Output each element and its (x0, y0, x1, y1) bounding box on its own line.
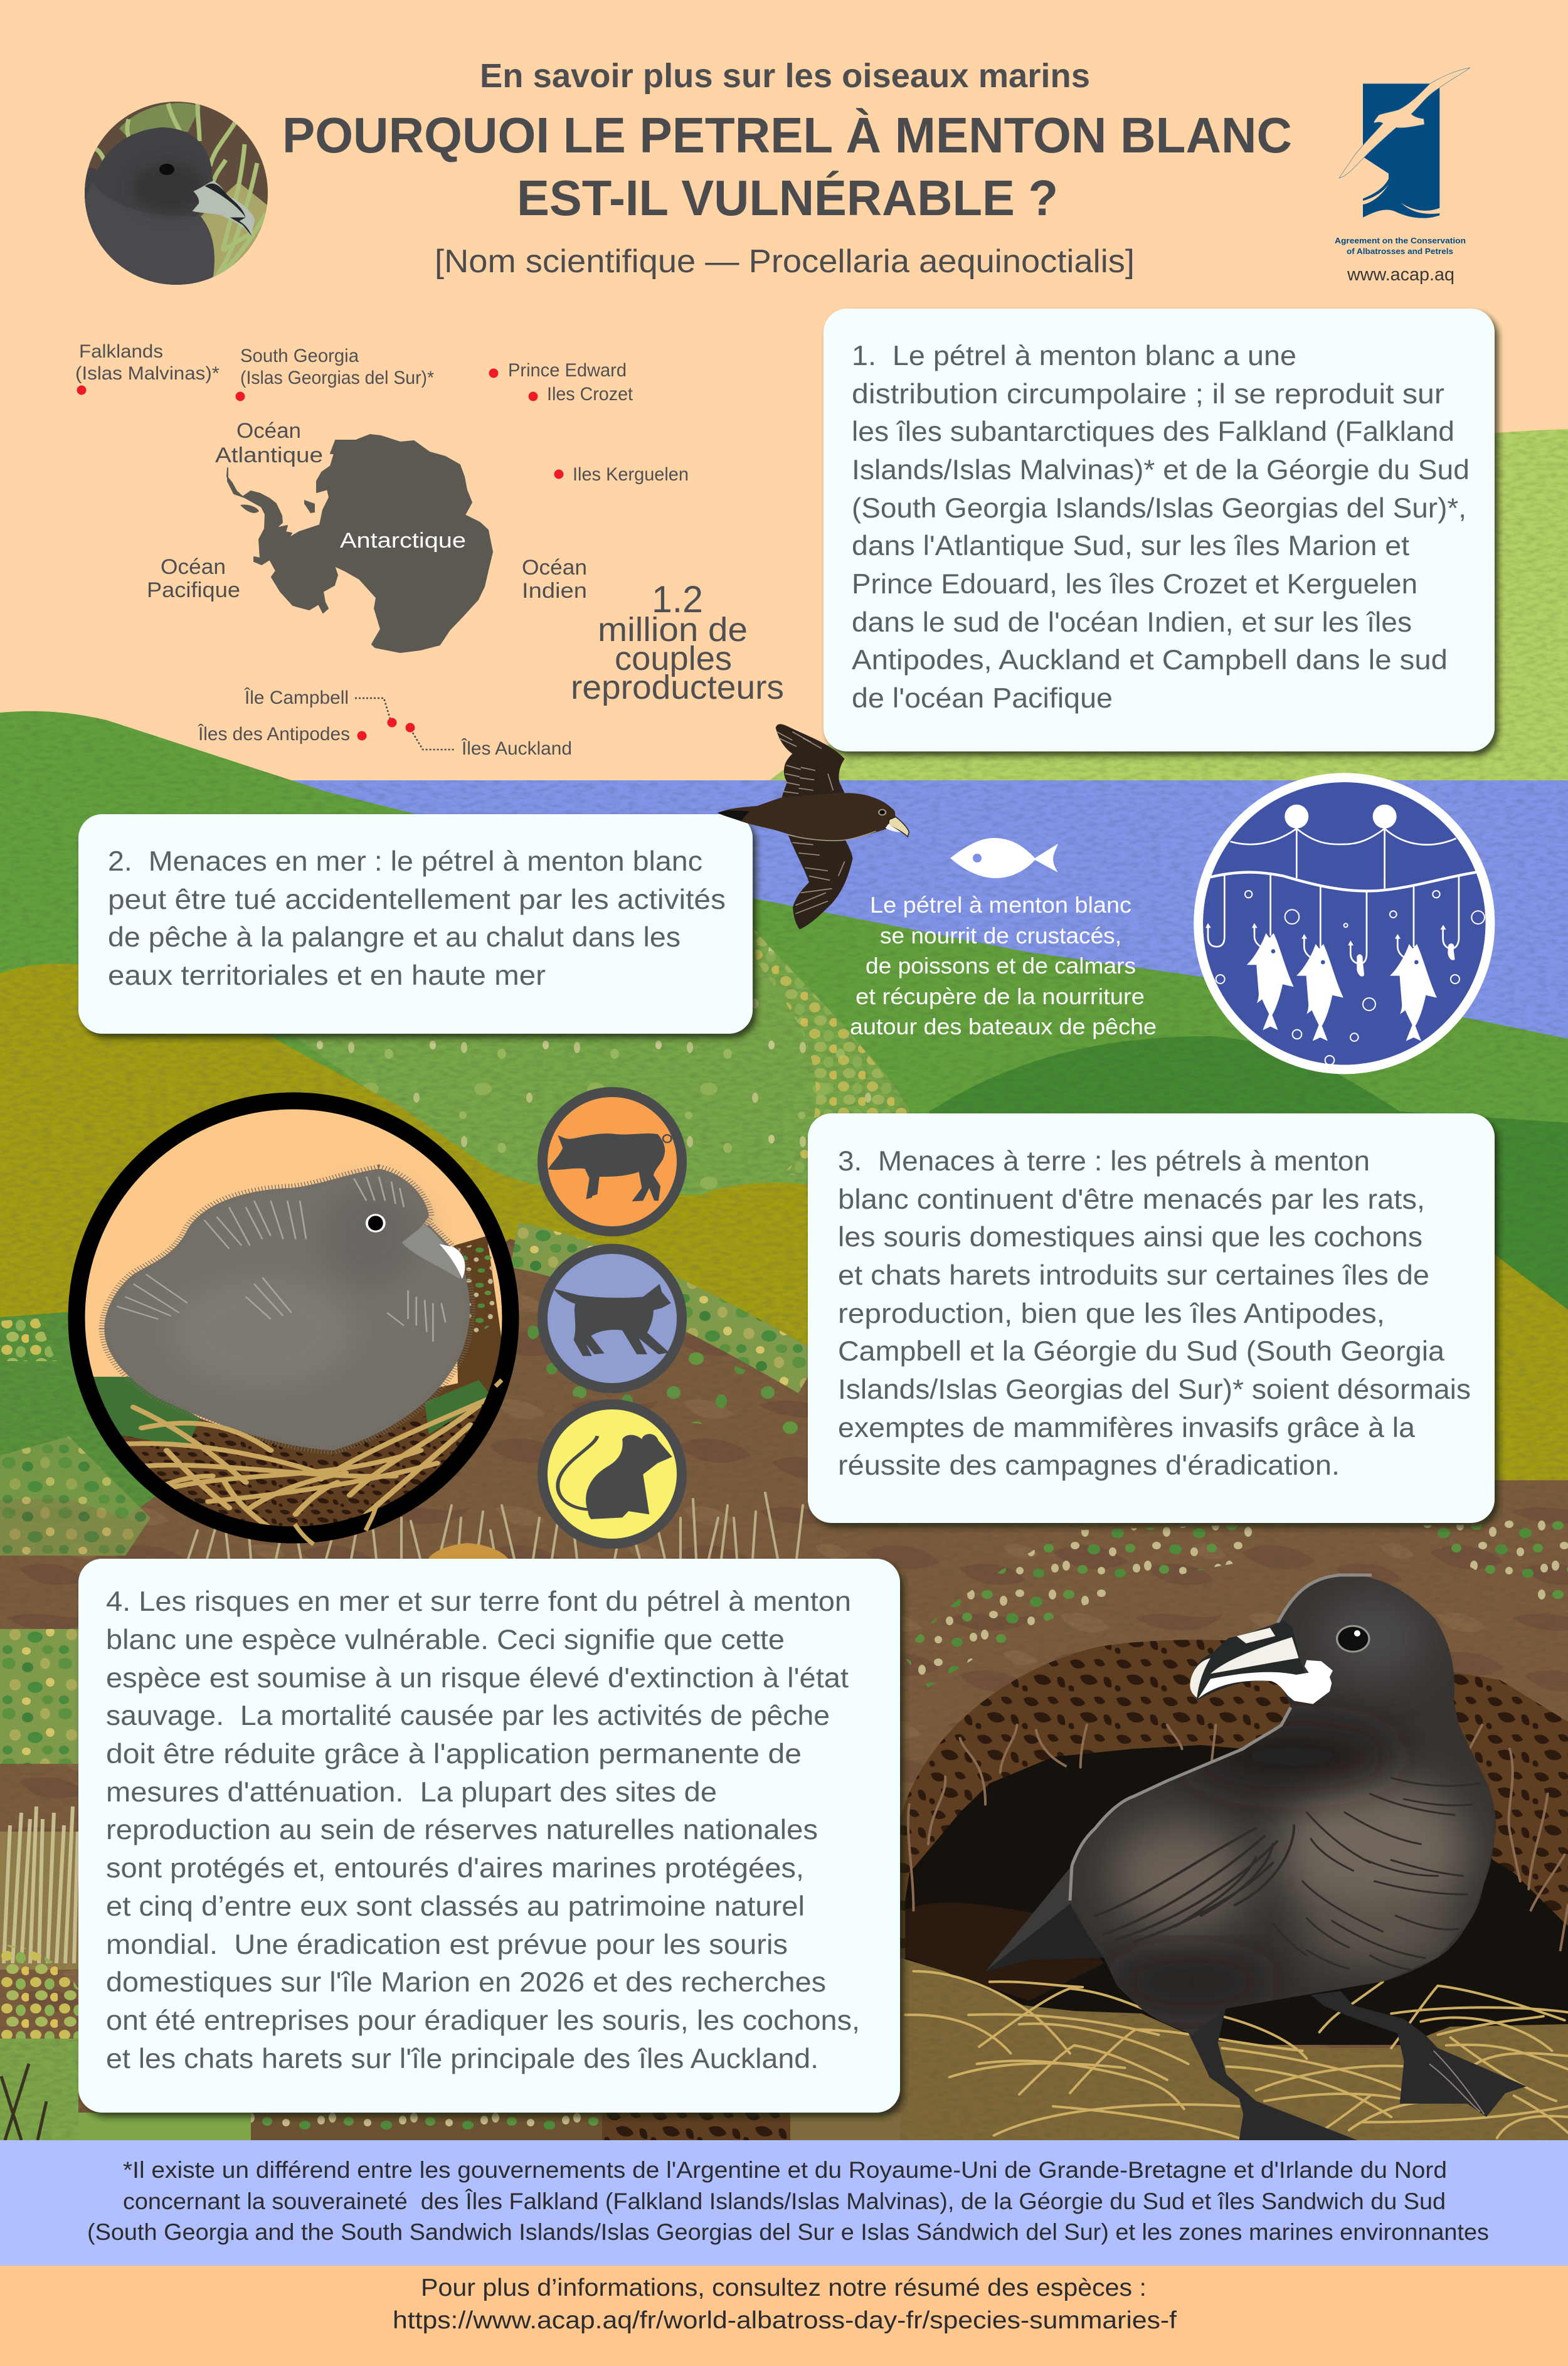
beak upper plate (1210, 1637, 1299, 1674)
logo caption: Agreement on the Conservation (1335, 236, 1466, 245)
mouse icon circle (543, 1404, 682, 1544)
beak (193, 181, 255, 236)
text: distribution paragraph: dans le sud de l'océan Indien, et sur les îles (852, 607, 1412, 638)
chick circle (63, 1091, 527, 1549)
ocean labels: Pacifique (147, 578, 240, 602)
bait worms (1357, 954, 1364, 977)
label Antarctique: Antarctique (340, 529, 466, 553)
scientific name: [Nom scientifique — Procellaria aequinoctialis] (435, 243, 1135, 280)
text: conservation paragraph: espèce est soumise à un risque élevé d'extinction à l'état (106, 1663, 849, 1694)
more information text (393, 2274, 1177, 2334)
tail (986, 1904, 1104, 1971)
island labels: Iles Crozet (547, 384, 633, 405)
white chin patch (1198, 1660, 1333, 1704)
text: distribution paragraph: distribution circumpolaire ; il se reproduit sur (852, 379, 1444, 410)
text: diet note: autour des bateaux de pêche (850, 1014, 1157, 1039)
text: threats on land paragraph: réussite des campagnes d'éradication. (838, 1450, 1340, 1481)
kicker heading: En savoir plus sur les oiseaux marins (480, 57, 1090, 95)
upper wing (776, 724, 845, 798)
moss patch left below chick (0, 1436, 151, 1556)
island labels: Iles Kerguelen (573, 464, 689, 485)
island labels: (Islas Georgias del Sur)* (240, 368, 434, 388)
flying petrel illustration (718, 724, 909, 930)
photo background foliage (119, 103, 201, 135)
text: distribution paragraph: Antipodes, Auckland et Campbell dans le sud (852, 645, 1448, 676)
population figure: million de (598, 611, 748, 649)
island labels (75, 341, 689, 759)
panel: card 3 threats on land (808, 1113, 1495, 1523)
map of Antarctica (75, 341, 784, 759)
ocean labels: Atlantique (215, 443, 323, 467)
eye (159, 164, 174, 175)
main title: POURQUOI LE PETREL À MENTON BLANC (282, 107, 1292, 163)
text: conservation paragraph: mondial. Une éradication est prévue pour les souris (106, 1929, 788, 1960)
text: conservation paragraph: 4. Les risques en mer et sur terre font du pétrel à menton (106, 1586, 851, 1617)
cat icon circle (543, 1249, 682, 1388)
text: conservation paragraph (106, 1586, 860, 2074)
burrow roots and straw (905, 1725, 1568, 2138)
moss at right edge (1411, 1505, 1568, 1612)
beak dark base (1190, 1620, 1305, 1700)
chick beak (402, 1225, 460, 1279)
grey back edge (1070, 1575, 1372, 1901)
ocean labels: Océan (522, 556, 587, 580)
logo caption: of Albatrosses and Petrels (1347, 247, 1453, 256)
beak culmen plate (1237, 1628, 1275, 1643)
bird cheek shading (132, 163, 207, 213)
logo caption (1335, 236, 1466, 256)
down feather marks (117, 1177, 445, 1342)
hooked fish (1247, 933, 1294, 1030)
text: distribution paragraph: les îles subantarctiques des Falkland (Falkland (852, 416, 1454, 447)
fishing longline circle (1199, 778, 1490, 1069)
icon: white fish (950, 838, 1058, 878)
body silhouette (985, 1575, 1496, 2035)
foot webbing lines (1429, 2050, 1485, 2114)
island labels: Îles Auckland (461, 738, 572, 759)
chick scene inside circle (85, 1109, 502, 1527)
island labels: Îles des Antipodes (198, 724, 350, 745)
text: diet note (850, 892, 1157, 1039)
belly line (788, 831, 876, 841)
landscape background (0, 429, 1568, 2140)
lichen covered bush (290, 928, 909, 1198)
text: conservation paragraph: sauvage. La mortalité causée par les activités de pêche (106, 1700, 830, 1731)
island labels: South Georgia (240, 346, 359, 366)
left margin vegetation (0, 1629, 78, 2140)
olive hill (0, 963, 1568, 1518)
text: threats at sea paragraph: eaux territoriales et en haute mer (108, 960, 546, 991)
bare branches (600, 1007, 850, 1192)
text: distribution paragraph: (South Georgia Islands/Islas Georgias del Sur)*, (852, 493, 1466, 524)
brown mound (124, 1236, 502, 1460)
footnote text: concernant la souveraineté des Îles Falkland (Falkland Islands/Islas Malvinas), de la Géorgie du Sud et îles Sandwich du Sud (123, 2188, 1446, 2214)
bird body (75, 127, 215, 289)
floats and lines (1208, 829, 1476, 964)
text: threats at sea paragraph: de pêche à la palangre et au chalut dans les (108, 922, 681, 953)
population figure: reproducteurs (571, 669, 784, 706)
footnote text (87, 2157, 1489, 2245)
footnote text: *Il existe un différend entre les gouvernements de l'Argentine et du Royaume-Uni de Grande-Bretagne et d'Irlande du Nord (123, 2157, 1447, 2183)
main title: EST-IL VULNÉRABLE ? (517, 170, 1058, 226)
eye (1336, 1625, 1370, 1653)
text: conservation paragraph: mesures d'atténuation. La plupart des sites de (106, 1777, 717, 1808)
text: distribution paragraph (852, 341, 1470, 714)
bird lower shading (82, 182, 215, 289)
burrow lower shadow (905, 1902, 1104, 2001)
moss ridge on slope (514, 1245, 810, 1374)
island labels: (Islas Malvinas)* (75, 363, 220, 384)
panel: card 4 conservation status (78, 1559, 900, 2113)
ocean labels: Indien (522, 579, 587, 603)
population figure: couples (615, 640, 732, 677)
mid green hill (0, 711, 1568, 1631)
more information band (0, 2266, 1568, 2366)
text: conservation paragraph: et les chats harets sur l'île principale des îles Auckland. (106, 2044, 818, 2074)
bubbles (1216, 891, 1485, 1065)
text: distribution paragraph: Prince Edouard, les îles Crozet et Kerguelen (852, 569, 1417, 600)
text: threats on land paragraph: reproduction, bien que les îles Antipodes, (838, 1298, 1385, 1329)
tail tip (718, 810, 750, 820)
straw crossing ring (295, 1380, 502, 1544)
text: threats on land paragraph: et chats harets introduits sur certaines îles de (838, 1260, 1429, 1291)
text: diet note: et récupère de la nourriture (856, 984, 1145, 1009)
text: conservation paragraph: et cinq d’entre eux sont classés au patrimoine naturel (106, 1891, 805, 1922)
wing feather lines (776, 732, 845, 914)
ocean labels (147, 419, 587, 603)
near leg and foot (1184, 2006, 1357, 2140)
text: threats on land paragraph (838, 1146, 1471, 1481)
pig icon circle (543, 1092, 682, 1231)
scattered moss on earth (521, 1280, 809, 1436)
panel: card 2 threats at sea (78, 814, 753, 1034)
big white-chinned petrel illustration (985, 1575, 1527, 2140)
left green moss slope (0, 1311, 163, 1530)
chick body (104, 1169, 470, 1450)
islands (240, 500, 315, 513)
beak (889, 817, 909, 837)
nest straw (125, 1396, 495, 1540)
more information text: https://www.acap.aq/fr/world-albatross-day-fr/species-summaries-f (393, 2307, 1177, 2334)
text: threats at sea paragraph: peut être tué accidentellement par les activités (108, 884, 726, 915)
burrow dark interior (905, 1745, 1568, 2045)
footnote band (0, 2140, 1568, 2266)
dark green hill (930, 1036, 1568, 1380)
ocean labels: Océan (161, 555, 226, 579)
text: threats at sea paragraph (108, 846, 726, 991)
colony dots (77, 369, 563, 740)
island labels: Falklands (79, 341, 163, 362)
black ring (77, 1101, 511, 1535)
burrow arch (900, 1640, 1568, 2007)
text: diet note: de poissons et de calmars (866, 953, 1136, 979)
chick eye (366, 1214, 386, 1233)
website: www.acap.aq (1347, 265, 1454, 285)
text: conservation paragraph: blanc une espèce vulnérable. Ceci signifie que cette (106, 1625, 785, 1655)
hook arrow tips (1205, 923, 1446, 945)
text: diet note: Le pétrel à menton blanc (870, 892, 1131, 918)
text: distribution paragraph: de l'océan Pacifique (852, 683, 1113, 714)
text: diet note: se nourrit de crustacés, (880, 923, 1121, 948)
blue rectangle and bird (1339, 68, 1470, 218)
leader lines (355, 698, 455, 750)
main title (282, 107, 1292, 226)
far leg and foot (1311, 1991, 1527, 2117)
text: threats at sea paragraph: 2. Menaces en mer : le pétrel à menton blanc (108, 846, 702, 877)
logo: ACAP (1335, 68, 1470, 285)
blue sea band (270, 780, 1568, 1079)
text: conservation paragraph: ont été entreprises pour éradiquer les souris, les cochons, (106, 2005, 860, 2036)
brown earth ground (0, 1239, 1568, 2140)
body (718, 793, 896, 841)
lower wing (788, 836, 852, 930)
photo: petrel head (75, 102, 270, 289)
island labels: Île Campbell (244, 687, 349, 708)
beak hook (1190, 1658, 1210, 1698)
text: conservation paragraph: sont protégés et, entourés d'aires marines protégées, (106, 1853, 804, 1884)
text: threats on land paragraph: Campbell et la Géorgie du Sud (South Georgia (838, 1336, 1444, 1367)
title block (282, 57, 1292, 226)
text: conservation paragraph: doit être réduite grâce à l'application permanente de (106, 1739, 802, 1769)
text: conservation paragraph: domestiques sur l'île Marion en 2026 et des recherches (106, 1967, 826, 1998)
text: distribution paragraph: 1. Le pétrel à menton blanc a une (852, 341, 1296, 371)
moss on earth below card three (903, 1524, 1254, 1687)
light green far hill (770, 429, 1568, 815)
text: distribution paragraph: dans l'Atlantique Sud, sur les îles Marion et (852, 531, 1410, 561)
head details: beak, chin and eye (1190, 1620, 1370, 1704)
feather lines (1095, 1778, 1480, 1970)
body shading (985, 1593, 1480, 2003)
text: threats on land paragraph: exemptes de mammifères invasifs grâce à la (838, 1413, 1415, 1443)
island labels: Prince Edward (508, 360, 627, 381)
strip under card four (78, 2113, 905, 2140)
footnote text: (South Georgia and the South Sandwich Islands/Islas Georgias del Sur e Islas Sándwich del Sur) et les zones marines environnantes (87, 2219, 1489, 2245)
text: threats on land paragraph: 3. Menaces à terre : les pétrels à menton (838, 1146, 1370, 1177)
grass tufts above card four (188, 1493, 803, 1559)
text: threats on land paragraph: Islands/Islas Georgias del Sur)* soient désormais (838, 1374, 1471, 1405)
panel: card 1 distribution (824, 309, 1495, 751)
grass blades (91, 103, 267, 276)
text: threats on land paragraph: les souris domestiques ainsi que les cochons (838, 1222, 1422, 1253)
Antarctica silhouette (227, 435, 492, 652)
eye (878, 809, 886, 815)
text: threats on land paragraph: blanc continuent d'être menacés par les rats, (838, 1184, 1425, 1215)
small orange bush (428, 1543, 508, 1559)
text: distribution paragraph: Islands/Islas Malvinas)* et de la Géorgie du Sud (852, 455, 1470, 485)
text: conservation paragraph: reproduction au sein de réserves naturelles nationales (106, 1815, 818, 1845)
more information text: Pour plus d’informations, consultez notre résumé des espèces : (421, 2274, 1147, 2301)
population figure: 1.2 (652, 578, 703, 620)
nest ground (900, 1958, 1568, 2140)
photo straw grass (201, 182, 270, 289)
population figure (571, 578, 784, 706)
ocean labels: Océan (236, 419, 301, 443)
